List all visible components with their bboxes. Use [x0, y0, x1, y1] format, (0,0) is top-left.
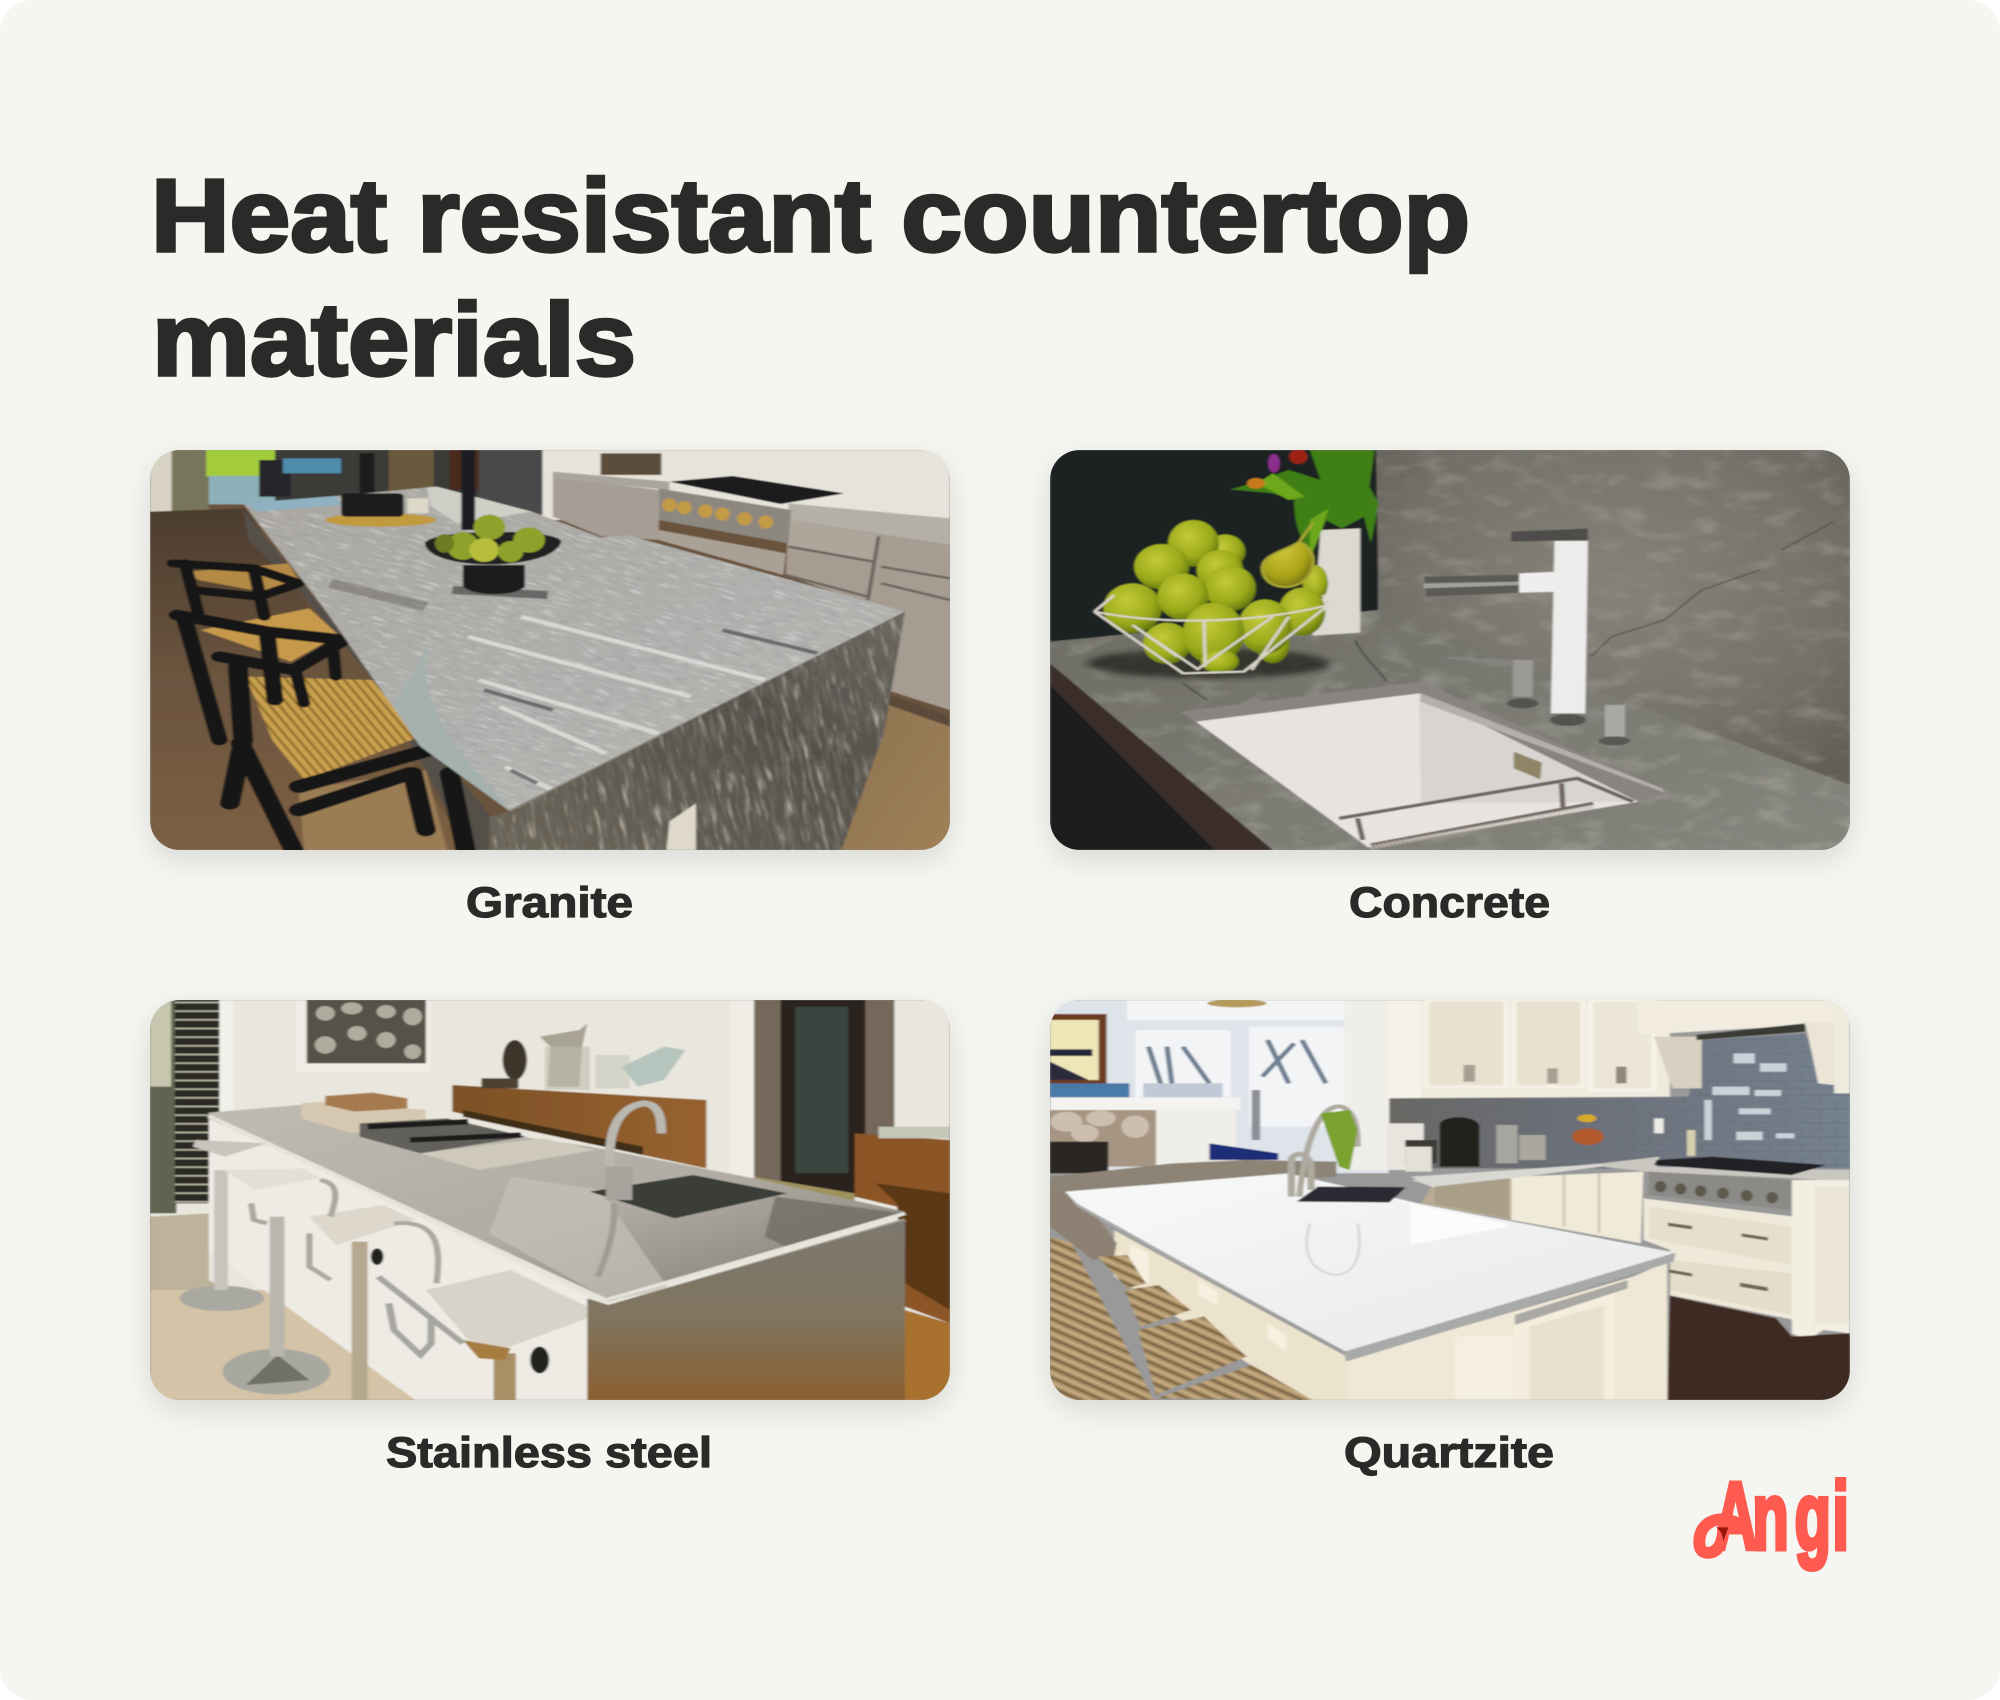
photo: concrete countertop with sink	[1050, 450, 1850, 850]
granite countertop	[242, 486, 904, 812]
back counter, range and base cabinets	[1411, 1157, 1850, 1340]
sink basin	[1180, 682, 1670, 850]
concrete backsplash	[1358, 450, 1855, 787]
decorative bowl of artichokes	[325, 450, 561, 594]
floor	[150, 508, 950, 850]
upper cabinets	[1384, 1000, 1670, 1098]
label: Concrete: Concrete	[1349, 879, 1550, 927]
faucet and soap dispensers	[1424, 528, 1630, 746]
title: Heat resistant countertop	[151, 158, 1470, 273]
label: Stainless steel: Stainless steel	[386, 1429, 712, 1477]
wall and back room	[150, 1000, 950, 1400]
island base shadow side	[243, 510, 489, 850]
photo: granite kitchen island	[150, 450, 950, 850]
wooden console and right cabinet	[452, 1085, 950, 1323]
white island side panel	[209, 1118, 587, 1400]
dark wood floor	[1667, 1296, 1850, 1400]
floor	[150, 1177, 950, 1400]
bar stools	[180, 1140, 587, 1400]
logo: Angi: Angi	[1714, 1462, 1849, 1569]
dishwasher	[1434, 1178, 1509, 1218]
concrete countertop	[1050, 607, 1850, 850]
blue tile backsplash	[1389, 1033, 1850, 1168]
sofa edge and wicker stools	[1050, 1190, 1313, 1400]
counter appliances	[1387, 1114, 1695, 1172]
stools	[173, 563, 466, 850]
stainless front panel	[587, 1220, 905, 1400]
sink and faucet	[590, 1103, 787, 1277]
waterfall side	[489, 612, 906, 850]
label: Granite: Granite	[466, 879, 633, 927]
vase and tulips	[1231, 449, 1379, 636]
title: materials	[152, 282, 636, 397]
back wall and doorway	[150, 450, 950, 850]
photo: stainless steel island	[150, 1000, 950, 1400]
living room background	[1050, 999, 1389, 1192]
sink, faucet and plant	[1291, 1106, 1405, 1202]
rear counter and cabinets	[553, 453, 950, 710]
dark wall and cabinet	[1050, 450, 1378, 850]
range hood	[1638, 1000, 1850, 1093]
books, cooktop and tray	[301, 1093, 595, 1170]
photo: quartzite kitchen	[1050, 1000, 1850, 1400]
quartzite countertop	[1065, 1164, 1675, 1362]
stainless countertop	[209, 1105, 905, 1307]
bowl of green apples and pears	[1094, 520, 1328, 673]
island cabinetry	[1114, 1230, 1667, 1400]
decor on console	[481, 1023, 685, 1090]
label: Quartzite: Quartzite	[1344, 1429, 1554, 1477]
